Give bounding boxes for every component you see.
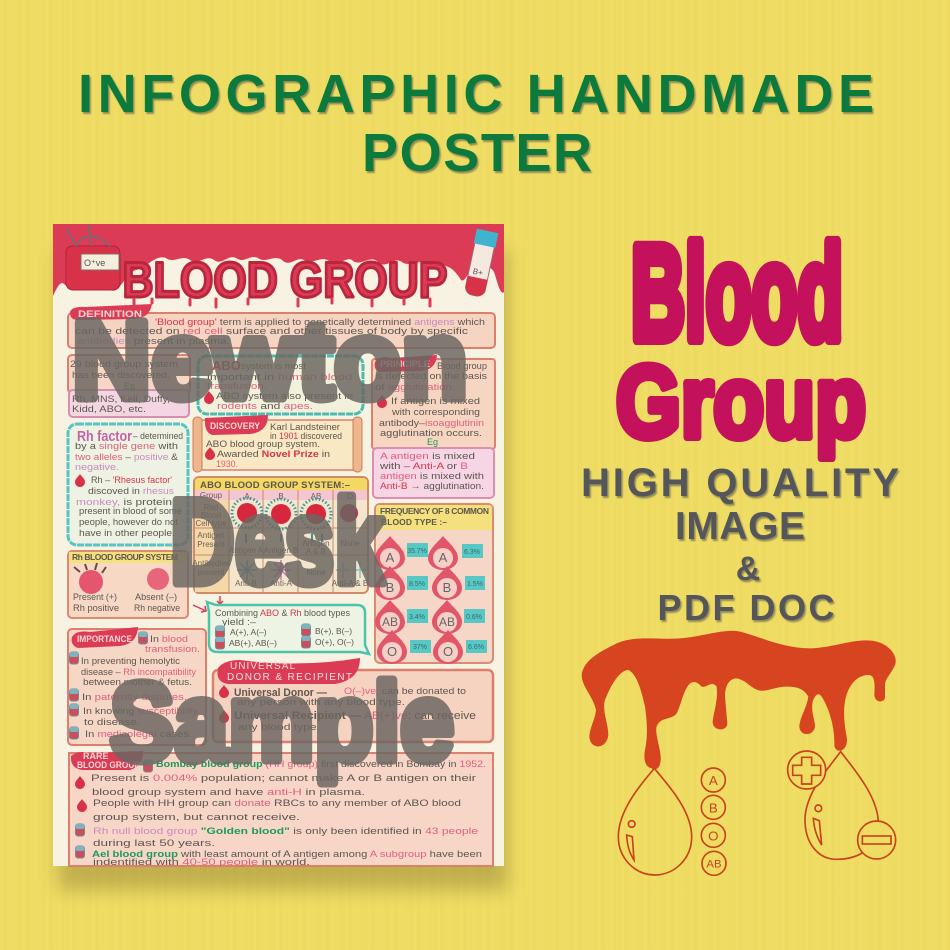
panel: 29 blood group systems: Eg <box>124 381 135 391</box>
panel: rare blood group: People with HH group can donate RBCs to any member of ABO blood <box>93 798 461 809</box>
poster header: dripping red band <box>53 224 504 296</box>
icon: minus circle <box>858 821 896 859</box>
panel: discovery scroll: DISCOVERY <box>210 421 260 431</box>
icon: blood type circles A B O AB: AB <box>706 859 722 871</box>
panel: frequency of 8 common blood types <box>375 504 493 664</box>
panel: ABO blood group table: ABO BLOOD GROUP SYSTEM:– <box>200 480 350 491</box>
text block: high quality image & pdf doc: & <box>736 550 760 588</box>
panel: Rh factor: have in other people. <box>79 528 175 539</box>
text block: high quality image & pdf doc: HIGH QUALITY <box>581 461 899 505</box>
watermark: Newton Desk Sample: Newton <box>72 299 468 422</box>
panel: ABO blood group table: AB <box>311 492 321 501</box>
panel: Rh blood group system: Rh negative <box>134 603 180 614</box>
panel: definition: can be detected on red cell surface and other tissues of body by specific <box>75 326 468 337</box>
icon: blood bag: O⁺ve <box>84 258 105 268</box>
panel: ABO blood group table: B <box>278 492 284 501</box>
panel: combining ABO and Rh: yield :– <box>222 617 257 628</box>
panel: principle: antibody– isoagglutinin <box>379 418 484 429</box>
panel: discovery scroll: Awarded Novel Prize in <box>217 449 330 460</box>
panel: principle: with – Anti-A or B <box>379 461 468 472</box>
panel: frequency of 8 common blood types: 6.6% <box>468 644 484 651</box>
panel: ABO blood group table: Red <box>204 503 218 512</box>
panel: ABO blood group table: A & B <box>306 547 326 556</box>
panel: ABO blood group table: Antigen B <box>264 546 298 555</box>
panel: Rh factor: monkey, is protein <box>76 497 172 508</box>
panel: ABO blood group table: Anti-B <box>235 579 257 588</box>
panel: rare blood group: indentified with 40-50 people in world. <box>93 857 310 868</box>
title: infographic handmade poster <box>78 64 874 183</box>
panel: principle: agglutination occurs. <box>380 428 482 439</box>
panel: frequency of 8 common blood types: AB <box>439 615 455 629</box>
panel: discovery scroll: ABO blood group system. <box>206 439 320 450</box>
panel: ABO blood group table: Cell type <box>195 519 227 528</box>
panel: ABO system: rodents and apes. <box>217 401 313 412</box>
panel: frequency of 8 common blood types: BLOOD TYPE :– <box>381 517 447 527</box>
panel: frequency of 8 common blood types: 0.6% <box>466 614 482 621</box>
icon: left blood drop outline <box>618 768 692 875</box>
panel: frequency of 8 common blood types: O <box>387 644 397 659</box>
panel: Rh blood group system: Rh positive <box>73 603 119 614</box>
panel: rare blood group: Ael blood group with least amount of A antigen among A subgroup have been <box>92 849 482 860</box>
panel: universal donor and recipient: Universal Donor — <box>234 687 327 699</box>
panel: importance: disease – Rh incompatibility <box>81 667 196 678</box>
panel: principle: Anti-B → agglutination. <box>380 481 484 492</box>
panel: universal donor and recipient: DONOR & RECIPIENT <box>227 672 352 683</box>
panel: Rh factor: – determined <box>133 431 183 442</box>
panel: combining ABO and Rh: O(+), O(–) <box>315 637 354 647</box>
panel: ABO system: ABO <box>212 358 241 373</box>
arrow: table to combining panel <box>217 596 223 604</box>
panel: 29 blood group systems: Rh, MNS, Kell, Duffy, <box>72 394 170 405</box>
icon: test tube: B+ <box>472 267 484 278</box>
panel: rare blood group: RARE <box>83 751 109 761</box>
icon: blood bag <box>66 224 120 290</box>
panel: importance: between mother & fetus. <box>83 677 192 688</box>
panel: ABO blood group table: None <box>306 568 326 577</box>
panel: discovery scroll <box>193 415 362 472</box>
panel: Rh blood group system: Absent (–) <box>135 592 177 603</box>
panel: discovery scroll: 1930. <box>216 459 238 470</box>
watermark: Newton Desk Sample: Desk <box>170 475 384 609</box>
panel: principle: is detected on the basis <box>375 371 487 382</box>
icon: plus circle <box>788 751 826 789</box>
panel: importance: In paternity disputes. <box>82 692 187 703</box>
panel: frequency of 8 common blood types: FREQUENCY OF 8 COMMON <box>380 506 489 516</box>
panel: ABO system <box>198 356 363 414</box>
panel: 29 blood group systems <box>68 355 190 417</box>
panel: frequency of 8 common blood types: 37% <box>413 644 427 651</box>
panel: frequency of 8 common blood types: 8.5% <box>409 581 425 588</box>
poster title: blood group: BLOOD GROUP <box>122 252 448 308</box>
watermark: Newton Desk Sample <box>72 299 468 784</box>
panel: Rh factor: people, however do not <box>79 517 178 528</box>
panel: ABO blood group table: None <box>340 539 360 548</box>
panel: 29 blood group systems: 29 blood group system <box>70 359 178 370</box>
panel: ABO system: system is most <box>241 361 306 372</box>
panel: 29 blood group systems: Kidd, ABO, etc. <box>72 404 146 415</box>
heading: Blood Group: Group <box>616 345 866 459</box>
panel: Rh factor: Rh – 'Rhesus factor' <box>91 475 172 486</box>
panel: principle: Blood group <box>437 361 487 372</box>
panel: ABO system: important in human blood <box>207 372 352 383</box>
heading: Blood Group <box>616 219 866 459</box>
panel: combining ABO and Rh: Combining ABO & Rh blood types <box>215 608 350 619</box>
panel: definition <box>68 304 495 348</box>
panel: Rh factor: by a single gene with <box>75 441 178 452</box>
panel: principle: Eg <box>427 437 438 447</box>
icon: blood type circles A B O AB: B <box>709 800 718 815</box>
icon: test tube <box>463 229 498 298</box>
panel: ABO blood group table: A <box>244 492 250 501</box>
panel: ABO blood group table: Anti-A <box>270 579 293 588</box>
panel: frequency of 8 common blood types: O <box>443 644 453 659</box>
panel: frequency of 8 common blood types: B <box>386 580 394 595</box>
illustration: dripping blood with drops <box>582 631 896 875</box>
panel: combining ABO and Rh: B(+), B(–) <box>315 626 352 636</box>
panel: principle: with corresponding <box>391 407 480 418</box>
panel: Rh blood group system <box>68 551 188 618</box>
watermark: Newton Desk Sample: Sample <box>110 661 454 784</box>
panel: universal donor and recipient: Universal Recipient — AB(+)ve ; can receive <box>234 710 476 722</box>
panel: importance: In knowing susceptibility <box>83 706 198 717</box>
panel: universal donor and recipient: O(–)ve; can be donated to <box>344 686 466 697</box>
panel: combining ABO and Rh: AB(+), AB(–) <box>229 638 277 648</box>
panel: ABO blood group table: O <box>347 492 353 501</box>
icon: blood type circles A B O AB <box>701 768 726 875</box>
panel: Rh factor <box>68 424 188 545</box>
panel: principle: of agglutination. <box>375 382 455 393</box>
panel: ABO blood group table: Present <box>197 540 226 549</box>
panel: ABO blood group table: Anti-A & B <box>332 579 368 588</box>
panel: importance: to disease. <box>84 717 140 728</box>
panel: ABO blood group table: Group <box>200 491 223 500</box>
panel: Rh blood group system: Present (+) <box>73 592 117 603</box>
panel: frequency of 8 common blood types: 3.4% <box>409 614 425 621</box>
panel: rare blood group: blood group system and have anti-H in plasma. <box>92 787 365 798</box>
panel: definition: 'Blood group' term is applied to genetically determined antigens which <box>155 317 485 328</box>
text block: high quality image & pdf doc <box>581 461 899 628</box>
panel: importance <box>68 627 206 745</box>
panel: definition: antibodies present in plasma. <box>77 336 230 347</box>
panel: universal donor and recipient: any person with any blood type. <box>237 697 405 708</box>
panel: ABO blood group table <box>192 477 368 593</box>
panel: Rh factor: two alleles – positive & <box>75 452 179 463</box>
arrow: Rh system to combining panel <box>193 605 206 612</box>
panel: ABO blood group table: Antigen A <box>229 546 264 555</box>
icon: blood type circles A B O AB: O <box>708 828 719 843</box>
panel: universal donor and recipient: UNIVERSAL <box>230 661 295 672</box>
panel: rare blood group: Present is 0.004% population; cannot make A or B antigen on their <box>91 773 476 784</box>
poster shadow <box>58 250 508 890</box>
panel: ABO blood group table: Antibodies <box>192 559 230 568</box>
icon: right blood drop outline <box>805 752 878 859</box>
panel: discovery scroll: in 1901 discovered <box>270 431 342 442</box>
panel: principle <box>372 355 495 498</box>
panel: ABO blood group table: Antigen <box>302 539 330 548</box>
panel: principle: A antigen is mixed <box>380 451 475 462</box>
title: infographic handmade poster: INFOGRAPHIC HANDMADE <box>78 64 874 124</box>
panel: ABO blood group table: Blood <box>201 511 221 520</box>
panel: universal donor and recipient: any blood type. <box>238 722 320 733</box>
panel: combining ABO and Rh <box>207 602 369 654</box>
panel: importance: In medicolegal cases. <box>85 729 192 740</box>
panel: frequency of 8 common blood types: B <box>443 580 451 595</box>
panel: Rh factor: Rh factor <box>77 428 132 445</box>
panel: Rh factor: negative. <box>75 462 119 473</box>
title: infographic handmade poster: POSTER <box>362 123 592 183</box>
text block: high quality image & pdf doc: IMAGE <box>675 505 805 548</box>
icon: blood type circles A B O AB: A <box>709 773 718 788</box>
panel: frequency of 8 common blood types: 1.5% <box>467 581 483 588</box>
panel: principle: If antigen is mixed <box>391 396 480 407</box>
panel: universal donor and recipient <box>213 658 493 742</box>
panel: ABO system: transfusion. <box>207 381 267 392</box>
text block: high quality image & pdf doc: PDF DOC <box>658 587 834 628</box>
panel: ABO blood group table: present <box>198 568 225 577</box>
panel: frequency of 8 common blood types: A <box>386 550 395 565</box>
panel: frequency of 8 common blood types: 35.7% <box>407 548 427 555</box>
panel: frequency of 8 common blood types: A <box>439 550 448 565</box>
icon: dripping blood <box>582 631 896 769</box>
panel: rare blood group: group system, but cannot receive. <box>93 812 300 823</box>
panel: rare blood group <box>69 751 493 868</box>
panel: importance: IMPORTANCE <box>77 634 132 644</box>
panel: frequency of 8 common blood types: 6.3% <box>464 549 480 556</box>
panel: Rh blood group system: Rh BLOOD GROUP SYSTEM <box>72 552 178 562</box>
panel: importance: In preventing hemolytic <box>81 656 180 667</box>
panel: rare blood group: BLOOD GROUP <box>77 760 140 770</box>
panel: rare blood group: Bombay blood group (HH group) first discovered in Bombay in 1952. <box>156 759 486 770</box>
panel: definition: DEFINITION <box>78 309 142 319</box>
panel: importance: In blood <box>150 634 188 645</box>
panel: importance: transfusion. <box>145 644 200 655</box>
panel: Rh factor: present in blood of some <box>79 506 182 517</box>
panel: principle: PRINCIPLE <box>380 359 430 369</box>
panel: principle: antigen is mixed with <box>380 471 484 482</box>
panel: ABO system: ABO system also present in <box>216 391 353 402</box>
panel: 29 blood group systems: has been discovered. <box>72 370 170 381</box>
panel: Rh factor: discoved in rhesus <box>88 486 174 497</box>
panel: ABO blood group table: Antigen <box>197 531 225 540</box>
panel: rare blood group: Rh null blood group "Golden blood" is only been identified in 43 people <box>93 826 478 837</box>
panel: discovery scroll: Karl Landsteiner <box>270 422 340 433</box>
poster: hand drawn blood group sheet <box>53 224 504 868</box>
panel: frequency of 8 common blood types: AB <box>382 615 398 629</box>
panel: combining ABO and Rh: A(+), A(–) <box>230 627 267 637</box>
panel: rare blood group: during last 50 years. <box>93 838 215 849</box>
